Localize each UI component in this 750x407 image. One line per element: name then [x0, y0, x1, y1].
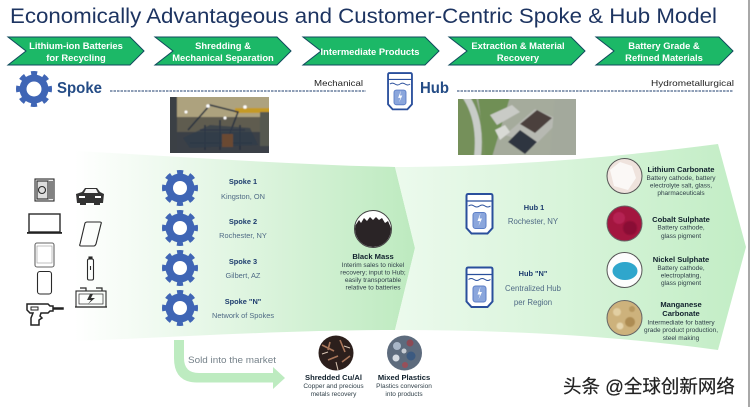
chevron: battery grade — [596, 37, 733, 65]
black mass text: easily transportable — [345, 277, 402, 284]
nickel sulphate: electroplating, — [661, 272, 701, 280]
spoke 2: Rochester, NY — [219, 231, 267, 240]
photo: hub facility — [456, 97, 578, 157]
spoke N: Spoke "N" — [225, 297, 262, 306]
icon: car battery — [75, 288, 107, 307]
cobalt sulphate: Battery cathode, — [657, 224, 705, 232]
shredded Cu/Al: metals recovery — [311, 391, 357, 398]
shredded Cu/Al — [303, 336, 364, 398]
black mass text: recovery; input to Hub; — [340, 270, 406, 276]
spoke 2: Spoke 2 — [229, 217, 257, 226]
chevron: battery grade: Battery Grade & — [628, 40, 700, 51]
hub 1: Rochester, NY — [508, 217, 559, 226]
mixed plastics: into products — [385, 391, 423, 398]
spoke 3 — [165, 253, 261, 283]
mixed plastics: Plastics conversion — [376, 383, 432, 390]
lithium carbonate: pharmaceuticals — [657, 190, 705, 197]
nickel sulphate — [607, 252, 709, 288]
spoke locations — [165, 173, 274, 323]
process chevrons — [8, 37, 733, 65]
refined materials — [607, 158, 718, 342]
chevron: lithium-ion batteries — [8, 37, 144, 65]
lithium carbonate: Battery cathode, battery — [646, 175, 716, 182]
black mass text: Interim sales to nickel — [342, 262, 405, 269]
cobalt sulphate: Cobalt Sulphate — [652, 215, 710, 224]
spoke 3: Gilbert, AZ — [226, 271, 261, 280]
icon: hub bag — [388, 73, 412, 109]
chevron: lithium-ion batteries: for Recycling — [46, 52, 106, 63]
manganese carbonate: grade product production, — [644, 327, 718, 334]
spoke 1: Spoke 1 — [229, 177, 257, 186]
chevron: extraction — [449, 37, 585, 65]
black mass text: Black Mass — [352, 252, 394, 261]
black mass text — [340, 252, 406, 292]
chevron: shredding: Shredding & — [195, 40, 251, 51]
hub 1 — [466, 194, 559, 234]
watermark: 头条 @全球创新网络 — [563, 376, 735, 397]
spoke 1 — [165, 173, 265, 203]
manganese carbonate: Intermediate for battery — [647, 320, 715, 326]
lithium carbonate: Lithium Carbonate — [647, 165, 715, 174]
chevron: lithium-ion batteries: Lithium-ion Batteries — [29, 40, 123, 51]
mechanical label: Mechanical — [314, 78, 363, 88]
icon: spoke gear — [19, 74, 49, 104]
chevron: battery grade: Refined Materials — [625, 52, 703, 63]
icon: tilted phone — [80, 222, 101, 246]
shredded Cu/Al: Copper and precious — [303, 383, 364, 390]
manganese carbonate — [607, 300, 718, 342]
photo: spoke facility — [170, 97, 269, 153]
icon: cylindrical battery — [88, 257, 94, 280]
page right edge line — [748, 0, 750, 407]
hub N: Centralized Hub — [505, 284, 562, 293]
icon: laptop — [27, 214, 62, 234]
hub N — [466, 268, 562, 307]
sold into the market label: Sold into the market — [188, 355, 276, 366]
spoke N: Network of Spokes — [212, 311, 274, 320]
shredded Cu/Al: Shredded Cu/Al — [305, 373, 362, 382]
icon: safe — [35, 179, 54, 201]
nickel sulphate: Nickel Sulphate — [653, 255, 709, 264]
flow band: right section — [395, 144, 746, 350]
spoke 1: Kingston, ON — [221, 192, 265, 201]
icon: tablet — [35, 243, 54, 267]
chevron: shredding: Mechanical Separation — [172, 52, 274, 63]
black mass text: relative to batteries — [346, 284, 401, 292]
spoke label: Spoke — [57, 80, 102, 97]
manganese carbonate: steel making — [663, 335, 700, 342]
chevron: shredding — [155, 37, 291, 65]
hub 1: Hub 1 — [524, 203, 544, 212]
black mass — [340, 210, 406, 292]
hub N: per Region — [514, 298, 552, 307]
mixed plastics — [376, 336, 432, 398]
manganese carbonate: Carbonate — [662, 309, 700, 318]
hub N: Hub "N" — [519, 269, 548, 278]
cobalt sulphate: glass pigment — [661, 233, 701, 240]
title: Economically Advantageous and Customer-Centric Spoke & Hub Model — [10, 5, 717, 28]
icon: car — [76, 188, 104, 205]
icon: black mass circle — [354, 210, 392, 250]
spoke header — [19, 74, 366, 104]
spoke 2 — [165, 213, 267, 243]
cobalt sulphate — [607, 206, 710, 241]
mixed plastics: Mixed Plastics — [378, 373, 430, 382]
hub locations — [466, 194, 562, 307]
lithium carbonate: electrolyte salt, glass, — [650, 182, 712, 190]
icon: drill — [27, 304, 63, 325]
icon: phone — [38, 272, 52, 294]
nickel sulphate: Battery cathode, — [657, 265, 705, 272]
chevron: intermediate products: Intermediate Products — [321, 46, 419, 57]
chevron: intermediate products — [303, 37, 439, 65]
source battery icons — [27, 179, 107, 325]
hydrometallurgical label: Hydrometallurgical — [651, 78, 734, 88]
lithium carbonate — [607, 158, 716, 197]
chevron: extraction: Recovery — [497, 52, 540, 63]
hub header — [388, 73, 734, 109]
spoke N — [165, 293, 274, 323]
manganese carbonate: Manganese — [660, 300, 702, 309]
flow band: left section — [0, 148, 415, 344]
nickel sulphate: glass pigment — [661, 280, 701, 287]
arrow: sold into the market — [174, 340, 285, 389]
hub label: Hub — [420, 80, 449, 97]
chevron: extraction: Extraction & Material — [471, 40, 565, 51]
spoke 3: Spoke 3 — [229, 257, 257, 266]
